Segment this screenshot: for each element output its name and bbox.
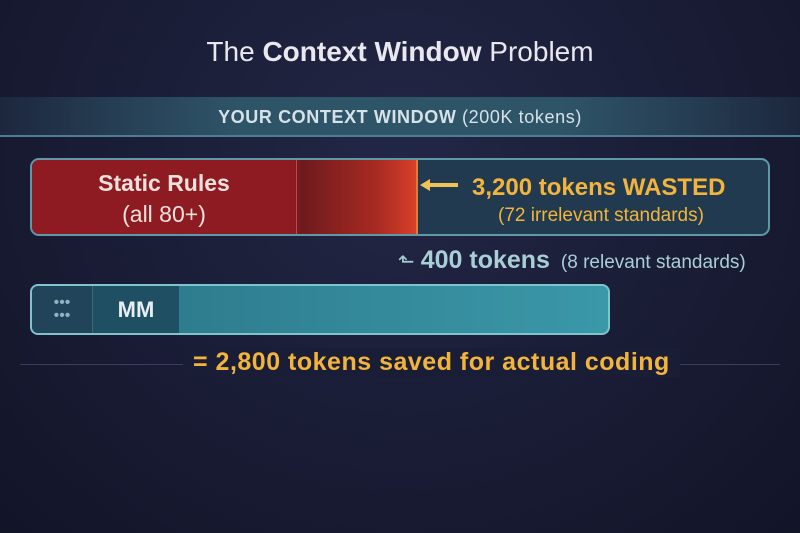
- title: The Context Window Problem: [206, 36, 594, 67]
- static rules label: (all 80+): [122, 201, 206, 227]
- bar: MM: [30, 284, 610, 335]
- wasted label: [472, 174, 725, 226]
- summary line: [20, 364, 780, 365]
- summary text: = 2,800 tokens saved for actual coding: [193, 348, 670, 376]
- static rules label: Static Rules: [98, 170, 230, 196]
- icon: dots: •••: [54, 307, 70, 324]
- arrow: wasted: [420, 179, 458, 191]
- icon: dots: [32, 286, 92, 333]
- static rules label: [98, 170, 230, 227]
- wasted label: 3,200 tokens WASTED: [472, 174, 725, 201]
- MM label: MM: [118, 297, 154, 322]
- header band: context window: [0, 97, 800, 137]
- label: 400 tokens: ⬑400 tokens (8 relevant standards): [398, 246, 746, 274]
- MM label: [92, 286, 179, 333]
- red segment: [32, 160, 418, 234]
- header band: context window: YOUR CONTEXT WINDOW (200K tokens): [218, 107, 582, 127]
- icon: dots: •••: [54, 294, 70, 311]
- bar: static rules: [30, 158, 770, 236]
- wasted label: (72 irrelevant standards): [498, 205, 704, 226]
